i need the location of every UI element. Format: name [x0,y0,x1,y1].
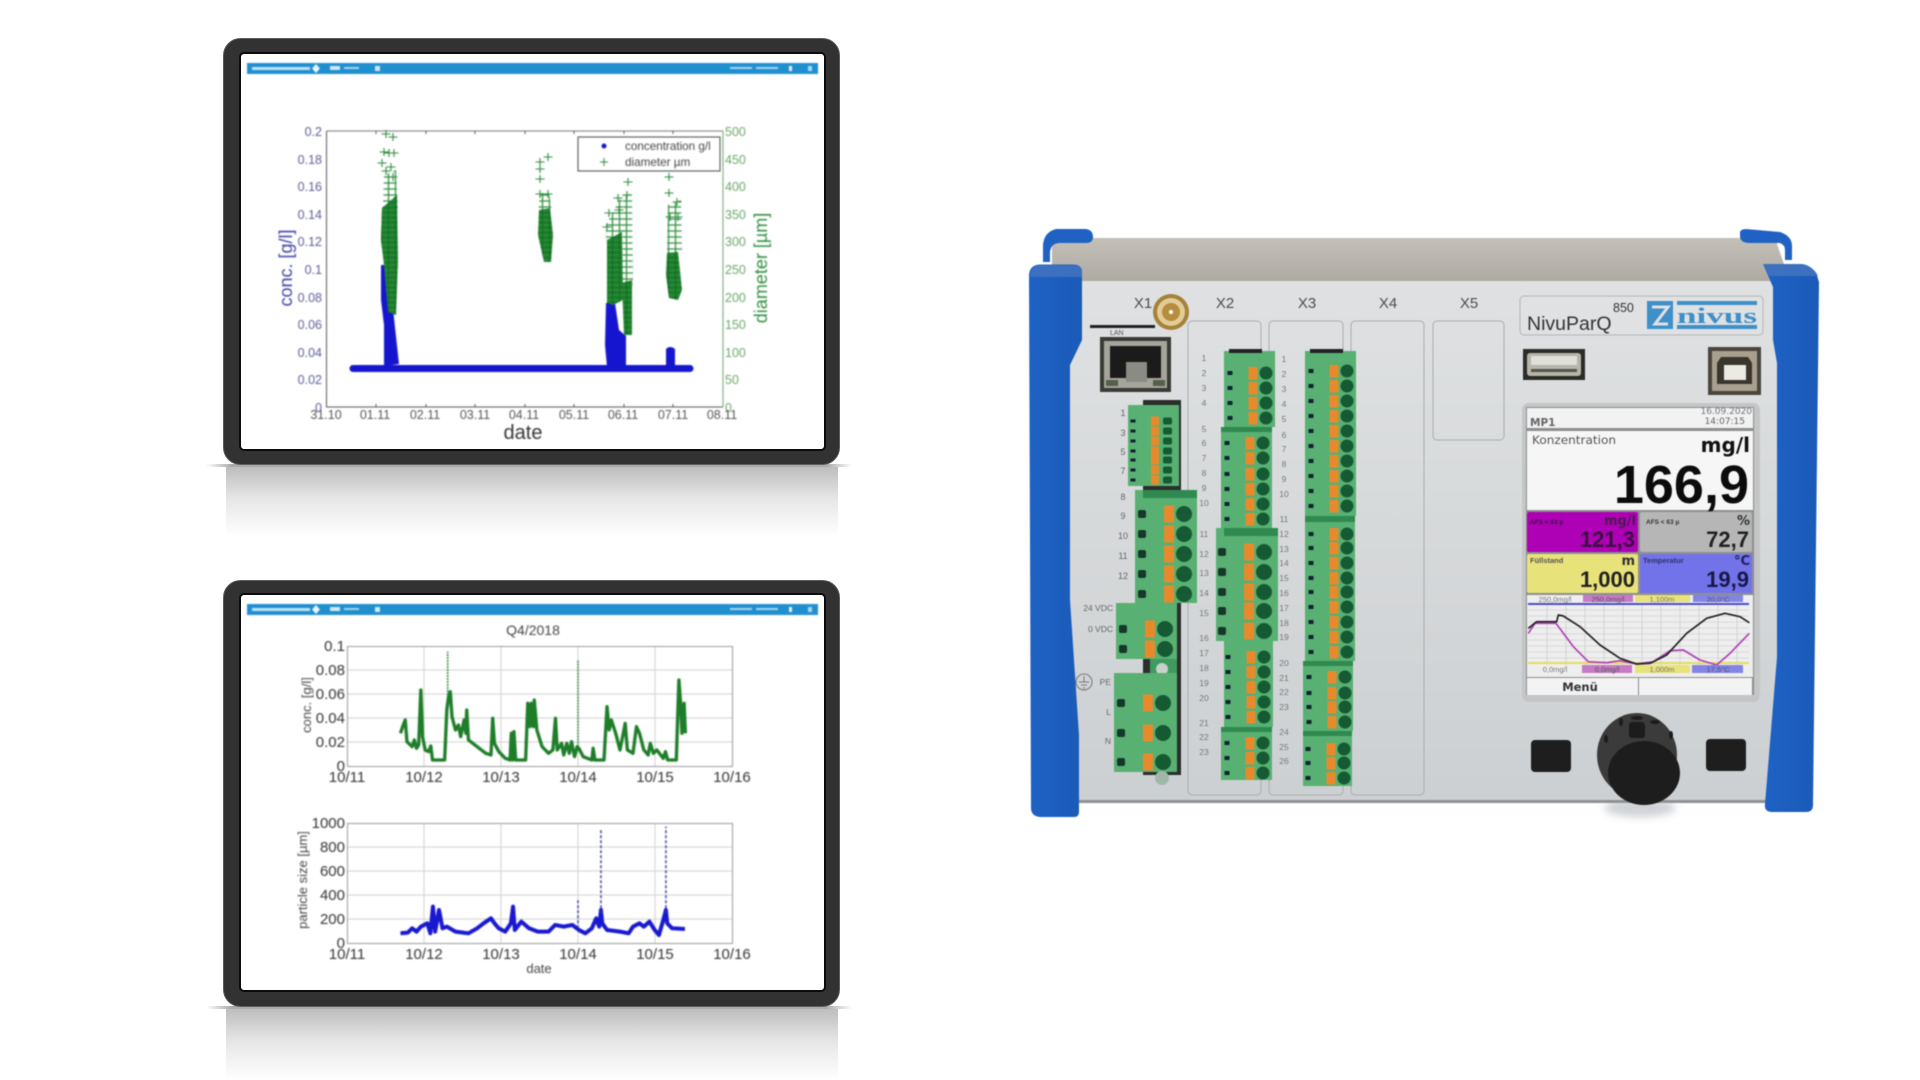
trend chart background [1527,595,1753,677]
tablet 1 base shadow [206,464,852,467]
rear right bumper [1740,229,1792,260]
tile: fill level: Füllstand [1530,556,1564,565]
X3 block 2 [1305,516,1355,661]
slot label X4: X4 [1379,295,1397,312]
left blue bumper [1029,264,1082,817]
X1 block 3 [1116,603,1177,659]
particle size x labels: 10/15 [636,946,674,963]
display header: 16.09.2020 [1700,407,1752,417]
tablet 1 bezel [224,38,840,464]
chart 1 date labels: 01.11 [360,408,390,422]
knob grip notches [1604,716,1673,743]
terminal block column X1 [1114,400,1197,785]
trend lower scale labels: 17,5°C [1706,665,1730,674]
tablet 2 reflection [226,1009,838,1080]
X3 pin numbers: 15 [1279,573,1289,583]
display background [1526,407,1754,695]
concentration x labels: 10/13 [482,769,520,786]
trend lower scale labels [1543,665,1743,674]
chart 1 date labels: 31.10 [310,408,342,422]
particle size x labels [329,946,751,963]
concentration y labels: 0.02 [316,734,345,751]
X2 pin numbers: 4 [1202,398,1207,408]
concentration y labels: 0.1 [324,638,345,655]
X3 pin numbers: 6 [1282,430,1287,440]
concentration x labels: 10/15 [636,769,674,786]
chart title: Q4/2018 [506,622,560,638]
tablet 1 reflection [226,467,838,537]
concentration grid [347,646,732,766]
concentration y labels: 0.06 [316,686,345,703]
chart 1 left axis labels: 0.1 [305,263,322,277]
tablet 2: Q4/2018 time series [206,580,852,1080]
chart 1 left axis labels: 0.2 [305,125,322,139]
X3 pin numbers: 13 [1279,544,1289,554]
tile: AFS percent: AFS < 63 µ [1646,519,1679,526]
trend lower scale labels: 0,0mg/l [1543,665,1568,674]
chart 1 right axis labels: 100 [725,346,746,360]
concentration y labels: 0.04 [316,710,345,727]
tablet 2 base shadow [206,1006,852,1009]
product nameplate [1520,296,1763,335]
concentration x labels [329,769,751,786]
X3 pin numbers: 9 [1282,474,1287,484]
power labels: 24 VDC [1083,603,1113,613]
icon: protective earth [1076,674,1092,690]
power labels: PE [1100,677,1111,687]
X3 pin numbers: 25 [1279,742,1289,752]
X3 pin numbers: 2 [1282,369,1287,379]
X1 pin numbers: 10 [1118,531,1128,541]
concentration chart [299,638,751,786]
X2 pin numbers: 7 [1202,453,1207,463]
device floor shadow [1604,799,1676,817]
LAN label [1090,325,1155,337]
X1 rear rail [1143,400,1181,775]
concentration x labels: 10/12 [405,769,443,786]
particle size y labels: 600 [320,863,345,880]
display bezel [1522,403,1760,702]
chart 1 left axis labels: 0.08 [298,291,322,305]
X3 pin numbers: 8 [1282,459,1287,469]
X2 pin numbers: 18 [1199,663,1209,673]
X3 pin numbers: 18 [1279,618,1289,628]
concentration x labels: 10/14 [559,769,597,786]
chart 1 date labels [310,408,737,422]
trend upper scale labels: 250,0mg/l [1592,595,1625,604]
right blue bumper [1763,264,1819,812]
trend upper scale labels: 1,100m [1649,595,1675,604]
tile: temperature: Temperatur [1643,556,1684,565]
tile: AFS mg/l: mg/l [1604,514,1636,529]
X3 block 4 [1303,731,1352,786]
time series charts [295,622,751,976]
concentration x labels: 10/11 [329,769,365,786]
particle size axis title: particle size [µm] [295,831,310,929]
X2 block 1 [1224,349,1275,427]
diameter light scatter zones [383,170,682,285]
X3 pin numbers: 23 [1279,702,1289,712]
X2 block 4 [1224,641,1273,727]
concentration and diameter scatter chart [276,125,771,444]
tablet 2 app bar [247,604,818,615]
X2 block 5 [1221,727,1272,780]
concentration axis title: conc. [g/l] [299,677,314,733]
X3 pin numbers: 12 [1279,529,1289,539]
X3 pin numbers: 11 [1280,514,1289,524]
rear left bumper [1043,229,1093,262]
chart 1 left axis labels: 0.02 [298,373,322,387]
chart 1 right axis labels: 150 [725,318,746,332]
main concentration value panel: 166,9 [1614,455,1749,515]
chart 1 left axis labels [298,125,322,415]
X2 pin numbers: 10 [1199,498,1209,508]
chart 1 left axis labels: 0.14 [298,208,322,222]
slot label X1: X1 [1134,295,1152,312]
trend grid [1528,604,1749,665]
slot outlines [1188,321,1504,795]
chart 1 date labels: 05.11 [559,408,589,422]
X2 pin numbers: 8 [1202,468,1207,478]
X2 pin numbers: 5 [1202,424,1207,434]
right bumper highlight [1763,264,1818,276]
particle size y labels: 400 [320,887,345,904]
tile: temperature: °C [1734,554,1750,569]
chart 1 concentration data [353,265,690,368]
chart 1 date labels: 08.11 [707,408,737,422]
diameter sparse points [378,130,682,231]
particle size x labels: 10/11 [329,946,365,963]
particle size x labels: 10/12 [405,946,443,963]
NIVUS logo [1647,301,1758,329]
X2 pin numbers: 6 [1202,438,1207,448]
particle size y labels: 1000 [312,815,345,832]
trend limit lines [1528,603,1749,664]
X2 pin numbers: 17 [1199,648,1209,658]
left soft button [1531,740,1571,772]
particle size x labels: 10/14 [559,946,597,963]
chart 1 left axis labels: 0.16 [298,180,322,194]
particle size y labels: 800 [320,839,345,856]
main concentration value panel [1527,431,1753,515]
X3 pin numbers: 4 [1282,399,1287,409]
chart 1 right axis labels: 500 [725,125,746,139]
X1 pin numbers: 11 [1118,551,1128,561]
chart 1 left axis labels: 0.04 [298,346,322,360]
X2 pin numbers [1199,353,1209,757]
chart 1 right axis labels: 400 [725,180,746,194]
rotary knob [1597,713,1680,805]
chart 1 plot frame [326,131,723,407]
X3 pin numbers: 24 [1279,727,1289,737]
tile: temperature [1640,554,1752,593]
X2 pin numbers: 1 [1202,353,1207,363]
X2 block 2 [1221,427,1272,528]
front panel [1066,281,1778,800]
tile: AFS mg/l: AFS < 63 µ [1530,519,1563,526]
X1 pin numbers: 12 [1118,571,1128,581]
terminal block column X3 [1303,349,1356,786]
X1 pin numbers: 3 [1120,428,1126,438]
X3 block 1 [1305,349,1356,516]
chart 1 right axis labels: 50 [725,373,739,387]
display header [1527,407,1753,429]
concentration y labels: 0 [337,758,345,775]
chart 1 right axis labels: 300 [725,235,746,249]
slot label X3: X3 [1298,295,1316,312]
X2 pin numbers: 20 [1199,693,1209,703]
tablet 1 app bar [247,63,818,74]
slot label X5: X5 [1460,295,1478,312]
X3 pin numbers: 26 [1279,756,1289,766]
NivuParQ 850 device [1029,229,1819,817]
chart 1 legend: diameter µm [625,156,690,169]
tile: temperature: 19,9 [1706,567,1749,592]
X3 pin numbers: 22 [1279,687,1289,697]
particle size trace [400,827,685,935]
chart 1 date labels: 06.11 [608,408,638,422]
X3 pin numbers [1279,354,1289,766]
particle size y labels: 200 [320,911,345,928]
X1 screw module [1150,659,1177,683]
concentration trace [400,652,685,760]
X3 pin numbers: 20 [1279,658,1289,668]
X2 pin numbers: 23 [1199,747,1209,757]
diameter dense zones [381,195,682,335]
concentration y labels: 0.08 [316,662,345,679]
X3 pin numbers: 14 [1279,558,1289,568]
X1 block 4 [1114,673,1177,772]
chart 1 diameter data [378,130,682,335]
left bumper highlight [1030,265,1082,277]
chart 1 legend: concentration g/l [625,140,711,153]
X3 pin numbers: 19 [1279,632,1289,642]
X2 pin numbers: 11 [1200,529,1209,539]
tile: fill level [1527,554,1638,593]
X1 pin numbers: 8 [1120,492,1126,502]
X2 pin numbers: 9 [1202,483,1207,493]
X2 pin numbers: 19 [1199,678,1209,688]
X3 pin numbers: 3 [1282,384,1287,394]
display header: MP1 [1530,417,1555,429]
X2 block 3 [1216,528,1278,641]
X1 block 2 [1135,490,1197,603]
X2 pin numbers: 15 [1199,608,1209,618]
particle size y labels: 0 [337,935,345,952]
X2 pin numbers: 22 [1199,732,1209,742]
tile: AFS mg/l: 121,3 [1580,527,1635,552]
diameter dense texture [381,195,682,335]
X2 pin numbers: 21 [1199,718,1209,728]
tablet 2 bezel [224,580,840,1006]
tablet 1: concentration and diameter [206,38,852,537]
device top cover [1052,238,1790,282]
right soft button [1706,739,1746,771]
particle size y labels [312,815,345,952]
trend upper scale labels: 20,0°C [1706,595,1730,604]
X2 pin numbers: 14 [1199,588,1209,598]
chart 1 left axis labels: 0.18 [298,153,322,167]
X1 pin numbers [1118,408,1128,581]
chart 1 right axis labels: 0 [725,401,732,415]
X3 pin numbers: 10 [1279,489,1289,499]
chart 1 x axis title: date [504,422,542,444]
tile: AFS mg/l [1527,512,1638,552]
particle size x labels: 10/16 [713,946,751,963]
power labels: N [1105,736,1111,746]
trend chart [1527,595,1753,677]
power labels: 0 VDC [1088,624,1113,634]
icon: USB B port [1708,347,1761,395]
particle size chart [295,815,751,976]
NIVUS logo: nivus [1677,303,1758,328]
power labels: L [1106,707,1111,717]
LAN label: LAN [1110,330,1124,337]
product name: NivuParQ [1527,313,1612,335]
nameplate outline [1520,296,1763,335]
knob cap [1608,741,1680,805]
chart 1 date labels: 02.11 [410,408,440,422]
display header: 14:07:15 [1705,417,1745,427]
chart 1 right axis labels: 200 [725,291,746,305]
X3 pin numbers: 16 [1279,588,1289,598]
chart 1 left axis title: conc. [g/l] [276,229,296,307]
chart 1 right axis labels [725,125,746,415]
product model: 850 [1613,301,1634,315]
chart 1 right axis labels: 450 [725,153,746,167]
trend lower scale labels: 0,0mg/l [1595,665,1620,674]
X3 pin numbers: 7 [1282,444,1287,454]
menu softkeys: Menü [1562,680,1598,694]
chart 1 left axis labels: 0.12 [298,235,322,249]
chart 1 right axis labels: 350 [725,208,746,222]
X3 pin numbers: 1 [1282,354,1287,364]
X2 pin numbers: 2 [1202,368,1207,378]
X3 block 3 [1303,661,1353,731]
trend upper scale labels: 250,0mg/l [1539,595,1572,604]
tile: fill level: 1,000 [1580,567,1635,592]
menu softkeys [1527,678,1752,695]
tile: AFS percent: 72,7 [1706,527,1749,552]
tile: AFS percent [1640,512,1752,552]
X1 pin numbers: 5 [1120,447,1126,457]
chart 1 date labels: 03.11 [460,408,490,422]
tablet 2 screen [240,594,825,991]
tile: fill level: m [1621,554,1635,569]
icon: gold antenna connector [1153,294,1189,330]
X2 pin numbers: 13 [1199,568,1209,578]
chart 1 right axis title: diameter [µm] [751,213,771,323]
power labels [1083,603,1113,746]
chart 1 legend [578,137,720,171]
display [1526,407,1754,695]
main concentration value panel: mg/l [1701,433,1750,457]
panel bottom edge [1066,800,1778,803]
chart 1 left axis labels: 0.06 [298,318,322,332]
X1 pin numbers: 7 [1120,466,1126,476]
tile: AFS percent: % [1737,514,1750,529]
X1 block 1 [1128,405,1179,486]
particle size x axis title: date [526,961,552,976]
chart 1 date labels: 04.11 [509,408,539,422]
X1 pin numbers: 9 [1120,511,1126,521]
concentration x labels: 10/16 [713,769,751,786]
X3 pin numbers: 21 [1279,673,1289,683]
X2 pin numbers: 3 [1202,383,1207,393]
particle size grid [347,823,732,944]
particle size x labels: 10/13 [482,946,520,963]
slot label X2: X2 [1216,295,1234,312]
X1 bottom screw [1155,771,1169,785]
trend curves [1528,613,1749,665]
knob grip [1597,713,1677,797]
X1 pin numbers: 1 [1120,408,1126,418]
chart 1 left axis labels: 0 [315,401,322,415]
icon: LAN jack [1100,337,1171,392]
X3 pin numbers: 17 [1279,603,1289,613]
concentration y labels [316,638,345,775]
X3 pin numbers: 5 [1282,414,1287,424]
chart 1 right axis labels: 250 [725,263,746,277]
X2 pin numbers: 16 [1199,633,1209,643]
chart 1 date labels: 07.11 [658,408,688,422]
tablet 1 screen [240,53,825,450]
main concentration value panel: Konzentration [1532,433,1616,447]
trend lower scale labels: 1,000m [1649,665,1675,674]
X2 pin numbers: 12 [1199,549,1209,559]
icon: USB A port [1523,349,1585,380]
terminal block column X2 [1216,349,1278,780]
trend upper scale labels [1539,595,1743,604]
